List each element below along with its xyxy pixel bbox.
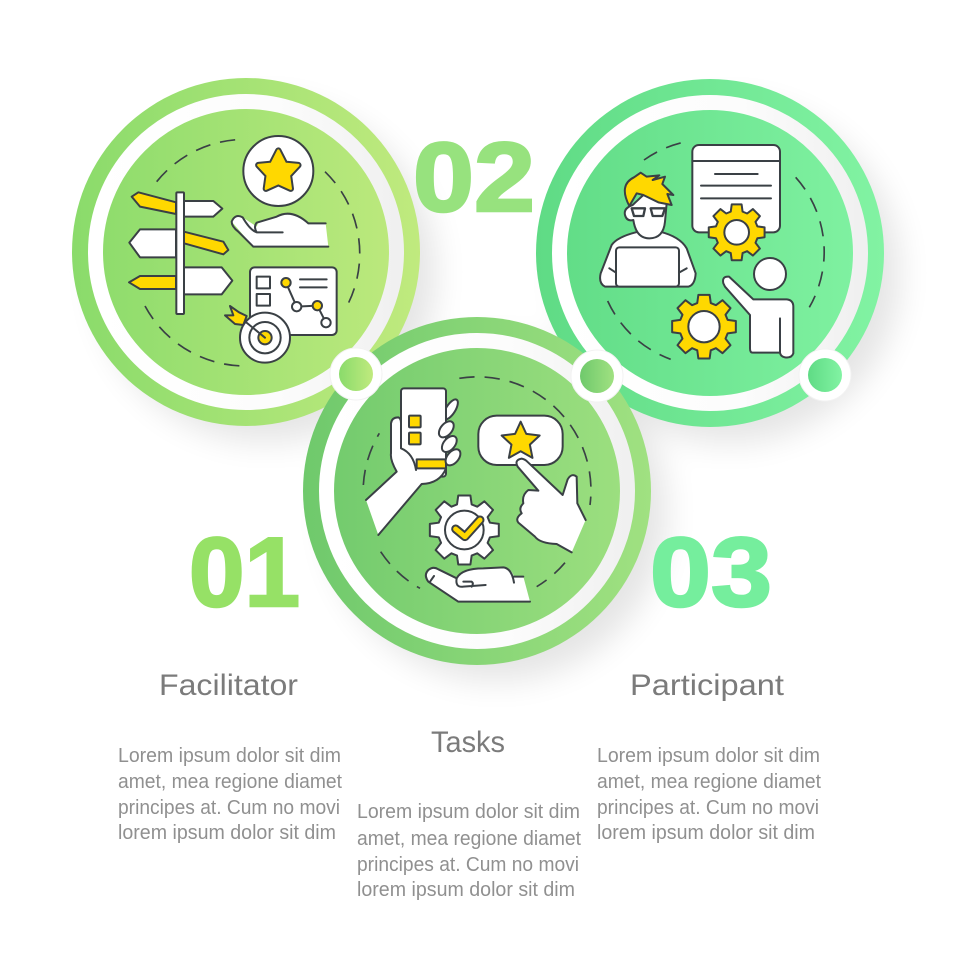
- text block: participant: [597, 745, 821, 844]
- icon: target with arrow: [225, 306, 290, 363]
- heading: Participant: Participant: [630, 669, 785, 702]
- icon: open hand: [232, 214, 328, 247]
- icon: big gear: [672, 295, 736, 359]
- number 03: 03: [650, 517, 772, 627]
- icon: gear with check: [430, 496, 499, 564]
- number 02: 02: [413, 122, 535, 232]
- node: tasks connector: [571, 350, 623, 402]
- icon group: participant: [600, 143, 824, 359]
- text block: tasks: principes at. Cum no movi: [357, 854, 579, 876]
- panel: facilitator circle: [72, 78, 420, 426]
- icon: pointing person: [723, 258, 793, 357]
- text block: tasks: lorem ipsum dolor sit dim: [357, 879, 575, 901]
- text block: facilitator: Lorem ipsum dolor sit dim: [118, 745, 341, 767]
- text block: tasks: Lorem ipsum dolor sit dim: [357, 801, 580, 823]
- number 01: 01: [189, 517, 300, 627]
- icon: chart card: [250, 267, 337, 335]
- icon group: tasks: [363, 377, 591, 602]
- heading: Tasks: Tasks: [431, 726, 505, 759]
- icon group: facilitator: [129, 136, 360, 366]
- icon: signpost: [129, 192, 232, 314]
- icon: star in circle: [243, 136, 313, 206]
- heading: Facilitator: Facilitator: [159, 669, 298, 702]
- text block: facilitator: amet, mea regione diamet: [118, 771, 342, 793]
- text block: tasks: amet, mea regione diamet: [357, 828, 581, 850]
- panel: participant circle: [536, 79, 884, 427]
- text block: participant: Lorem ipsum dolor sit dim: [597, 745, 820, 767]
- icon: gear small: [709, 204, 765, 260]
- text block: facilitator: [118, 745, 342, 844]
- icon: document: [692, 145, 780, 232]
- text block: participant: amet, mea regione diamet: [597, 771, 821, 793]
- panel: tasks circle: [303, 317, 651, 665]
- text block: facilitator: principes at. Cum no movi: [118, 797, 340, 819]
- icon: pointing hand: [516, 459, 586, 552]
- icon: person with laptop: [600, 173, 696, 287]
- text block: facilitator: lorem ipsum dolor sit dim: [118, 822, 336, 844]
- circle drop shadows: [96, 102, 900, 681]
- text block: participant: lorem ipsum dolor sit dim: [597, 822, 815, 844]
- icon: open hand bottom: [426, 567, 530, 602]
- text block: participant: principes at. Cum no movi: [597, 797, 819, 819]
- icon: star button: [478, 416, 563, 465]
- node: participant connector: [799, 349, 851, 401]
- node: facilitator connector: [330, 348, 382, 400]
- text block: tasks: [357, 801, 581, 901]
- icon: phone in hand: [366, 388, 463, 535]
